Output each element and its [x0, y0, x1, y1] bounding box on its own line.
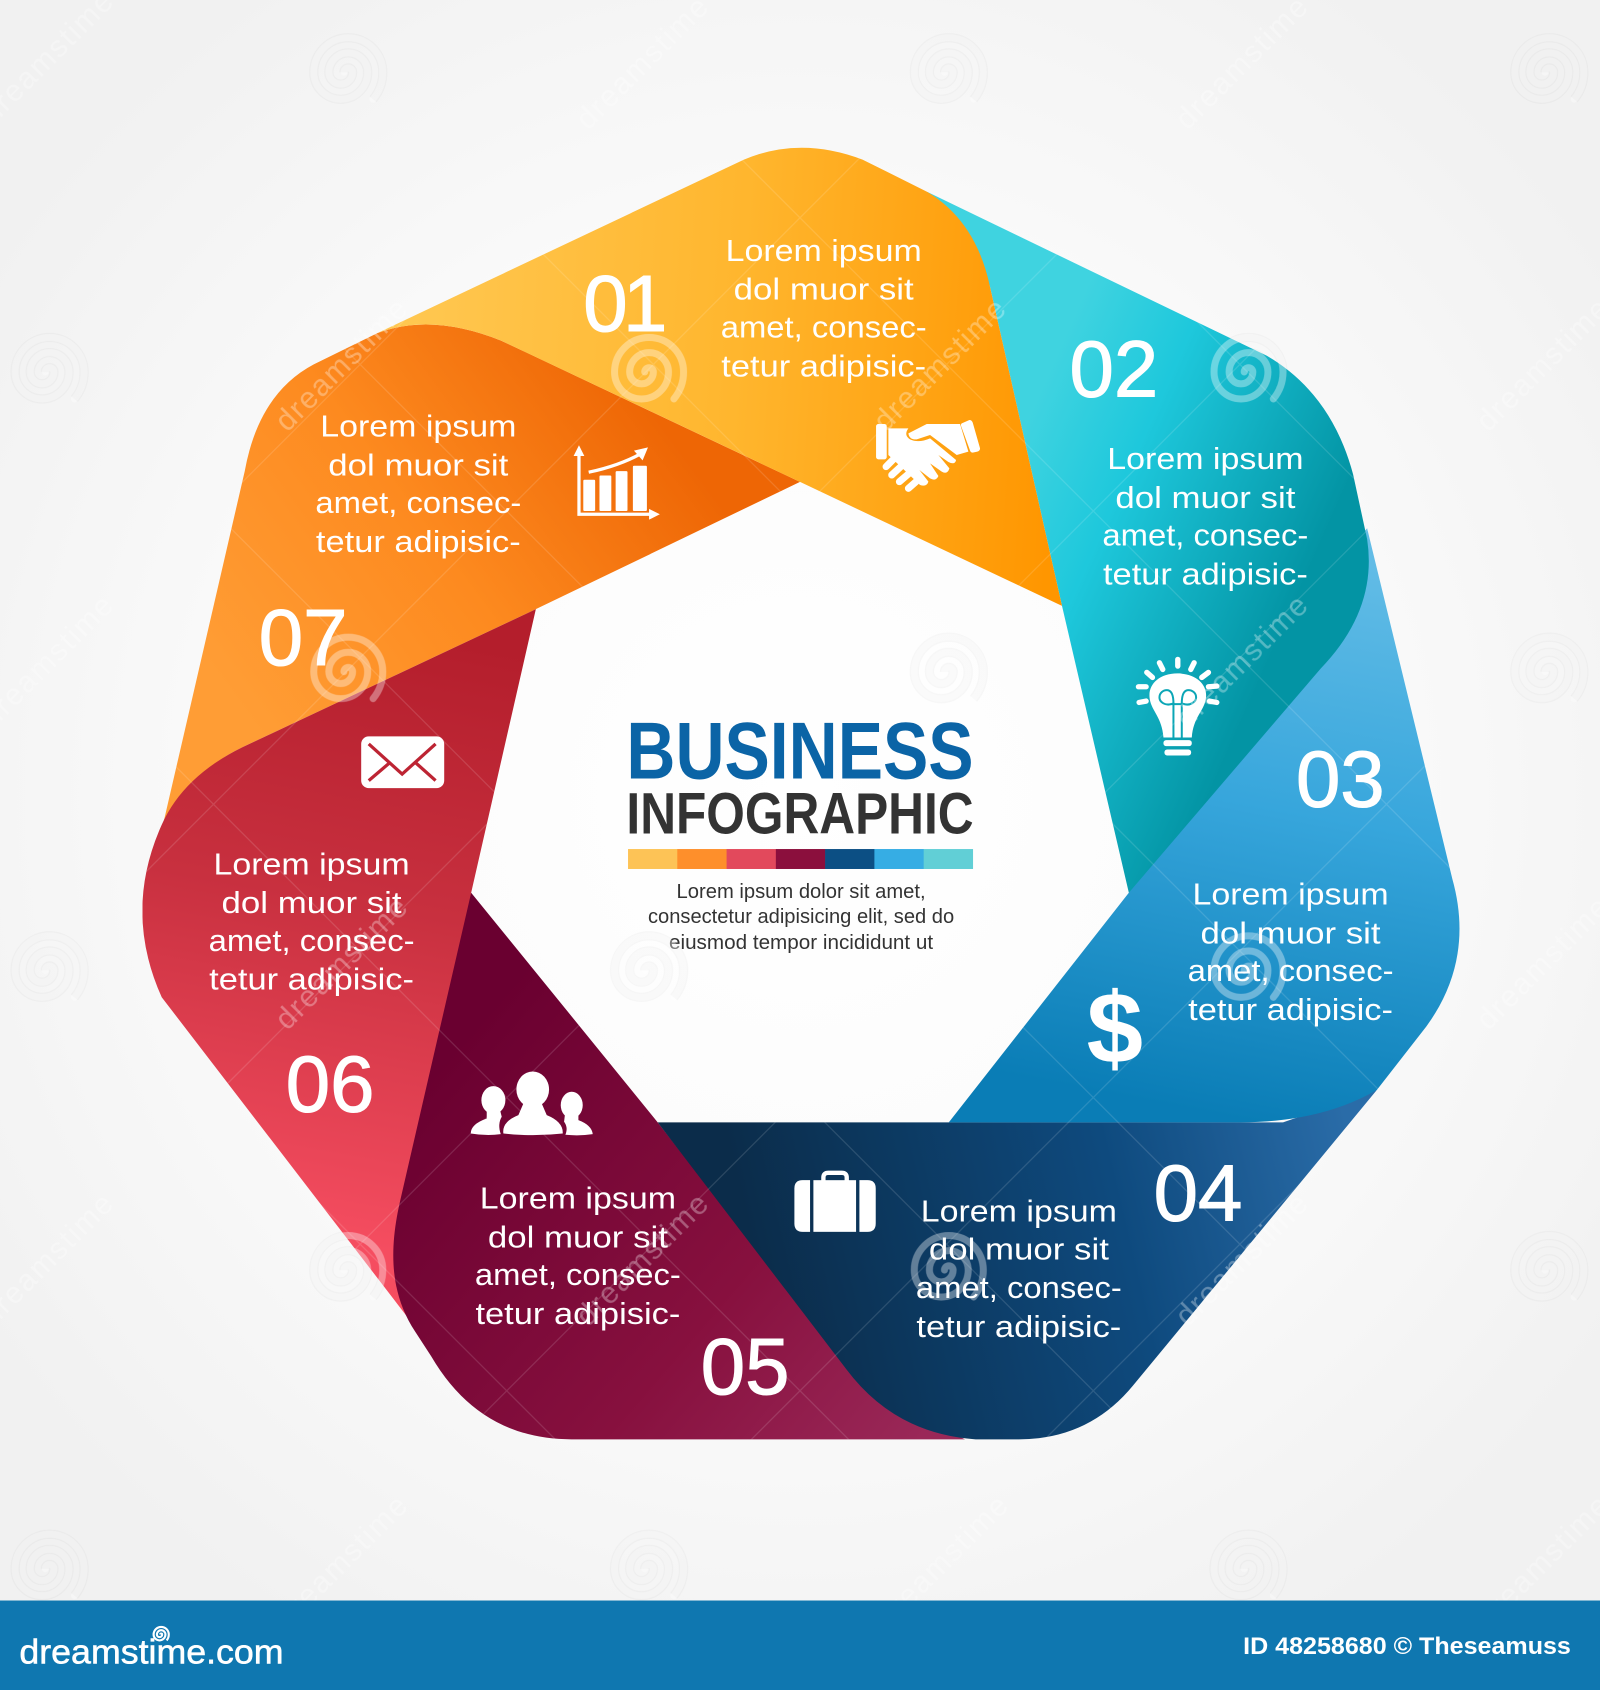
panel 06 red	[142, 609, 536, 1337]
text 02: dol muor sit	[1115, 480, 1296, 515]
number 02: 02	[1070, 325, 1158, 414]
text 03: Lorem ipsum	[1192, 877, 1389, 912]
panel 05 maroon	[393, 893, 965, 1439]
watermark: dreamstime text: dreamstime	[867, 293, 1013, 438]
text 04: dol muor sit	[929, 1231, 1109, 1266]
text 01: Lorem ipsum	[726, 233, 922, 268]
text 07: amet, consec-	[315, 485, 521, 520]
icon: people	[471, 1071, 593, 1135]
number 01: 01	[583, 259, 667, 348]
number 07: 07	[259, 593, 347, 682]
text 05: tetur adipisic-	[475, 1296, 680, 1331]
heading: infographic: INFOGRAPHIC	[626, 781, 974, 846]
colour bar	[628, 849, 973, 869]
text 05	[475, 1181, 681, 1331]
panel 07 orange	[162, 324, 800, 830]
icon: chart	[574, 445, 660, 520]
text 04: Lorem ipsum	[921, 1194, 1117, 1229]
text 03	[1188, 877, 1394, 1027]
watermark: dreamstime text: dreamstime	[1169, 1187, 1314, 1333]
description: eiusmod tempor incididunt ut	[669, 931, 933, 954]
text 06: dol muor sit	[222, 885, 402, 920]
icon: light bulb	[1138, 659, 1217, 755]
text 07: tetur adipisic-	[316, 524, 521, 559]
watermark: dreamstime text: dreamstime	[570, 589, 715, 734]
text 03: amet, consec-	[1188, 953, 1394, 988]
footer bar	[0, 1601, 1600, 1690]
number 04: 04	[1154, 1148, 1242, 1237]
text 04: tetur adipisic-	[916, 1309, 1121, 1344]
text 07	[315, 409, 521, 559]
text 01	[721, 233, 927, 383]
text 05: Lorem ipsum	[480, 1181, 676, 1216]
text 01: dol muor sit	[734, 272, 914, 307]
text 02: Lorem ipsum	[1107, 441, 1304, 476]
text 07: Lorem ipsum	[320, 409, 516, 444]
text 02: amet, consec-	[1102, 518, 1308, 553]
text 02: tetur adipisic-	[1103, 556, 1308, 591]
text 06: amet, consec-	[209, 923, 415, 958]
text 04	[916, 1194, 1122, 1344]
icon: dollar: $	[1087, 972, 1143, 1085]
text 03: tetur adipisic-	[1188, 992, 1393, 1027]
description: Lorem ipsum dolor sit amet,	[677, 880, 926, 903]
panel 04 navy	[658, 1090, 1377, 1439]
description: consectetur adipisicing elit, sed do	[648, 905, 954, 928]
description	[648, 880, 954, 954]
watermark: dreamstime text: dreamstime	[269, 293, 414, 438]
watermark: dreamstime text: dreamstime	[869, 1489, 1015, 1635]
footer logo: dreamstime.com	[19, 1634, 284, 1672]
panel 03 blue	[949, 528, 1459, 1122]
number 03: 03	[1296, 734, 1385, 823]
icon: briefcase	[794, 1173, 876, 1232]
panel 02 teal	[927, 192, 1369, 893]
heading: business: BUSINESS	[626, 706, 974, 796]
watermark: dreamstime text: dreamstime	[1169, 589, 1314, 734]
text 06: tetur adipisic-	[209, 962, 414, 997]
icon: envelope	[361, 736, 444, 788]
watermark: dreamstime text: dreamstime	[269, 891, 414, 1036]
watermark: lattice lines	[146, 158, 1450, 1440]
text 01: amet, consec-	[721, 309, 927, 344]
watermark: dreamstime text: dreamstime	[869, 891, 1015, 1036]
text 01: tetur adipisic-	[721, 348, 926, 383]
footer credit: ID 48258680 © Theseamuss	[1243, 1634, 1571, 1660]
text 04: amet, consec-	[916, 1270, 1122, 1305]
text 03: dol muor sit	[1201, 915, 1381, 950]
icon: handshake	[876, 420, 980, 488]
number 06: 06	[286, 1040, 374, 1129]
text 05: dol muor sit	[488, 1219, 668, 1254]
watermark: dreamstime text: dreamstime	[570, 1187, 715, 1333]
panel 01 yellow	[377, 148, 1062, 606]
text 05: amet, consec-	[475, 1257, 681, 1292]
title block	[626, 706, 974, 954]
text 06	[209, 846, 415, 997]
number 05: 05	[701, 1322, 790, 1411]
text 06: Lorem ipsum	[213, 846, 410, 881]
watermark: dreamstime text: dreamstime	[269, 1489, 414, 1635]
text 07: dol muor sit	[328, 447, 509, 482]
text 02	[1102, 441, 1308, 591]
